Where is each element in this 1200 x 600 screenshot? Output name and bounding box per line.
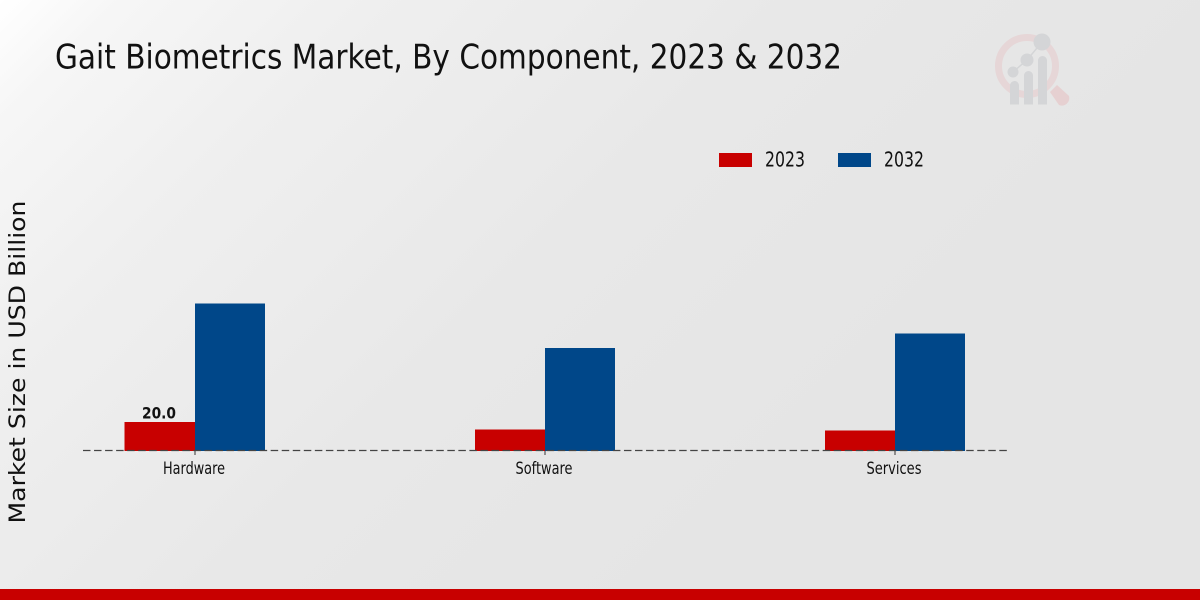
icon: watermark logo [998, 34, 1069, 106]
bar chart [83, 304, 1007, 478]
y-axis label: Market Size in USD Billion [5, 200, 31, 524]
category label: Software: Software [516, 459, 572, 478]
bar: Software 2023 [475, 430, 545, 451]
legend swatch: 2032 [838, 153, 871, 167]
legend swatch: 2023 [719, 153, 752, 167]
title: Gait Biometrics Market, By Component, 2023 & 2032 [55, 38, 842, 78]
category label: Hardware: Hardware [163, 459, 225, 478]
category label: Services: Services [866, 459, 922, 478]
legend label: 2032: 2032 [884, 148, 924, 172]
bar: Services 2032 [895, 334, 965, 451]
bar: Hardware 2023 [124, 422, 195, 451]
bar: Hardware 2032 [195, 304, 265, 451]
legend label: 2023: 2023 [765, 148, 805, 172]
footer bar [0, 589, 1200, 600]
data label: 20.0: 20.0 [142, 404, 176, 423]
bar: Software 2032 [545, 348, 615, 451]
legend [719, 148, 924, 172]
axis baseline [83, 450, 1007, 452]
bar: Services 2023 [825, 430, 895, 451]
